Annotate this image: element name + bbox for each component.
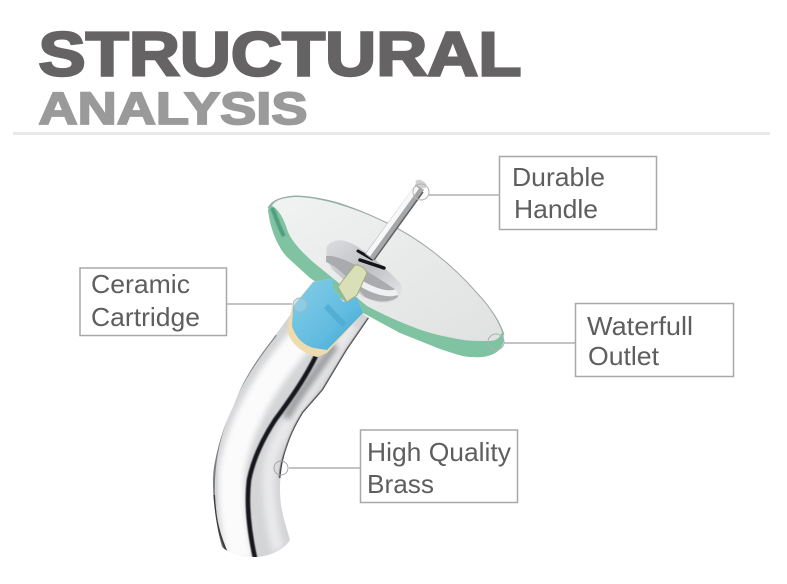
faucet spout	[212, 281, 369, 557]
callout: High Quality Brass: Brass	[367, 469, 434, 499]
lever handle	[368, 178, 428, 260]
glass disc	[268, 196, 504, 357]
title: STRUCTURAL: STRUCTURAL	[38, 20, 522, 90]
callout: High Quality Brass: High Quality	[367, 437, 511, 467]
subtitle: ANALYSIS: ANALYSIS	[38, 83, 308, 134]
callout: Waterfull Outlet: Outlet	[588, 341, 660, 371]
callout: Ceramic Cartridge: Cartridge	[91, 302, 200, 332]
blue ceramic cartridge	[287, 265, 367, 357]
callout: Waterfull Outlet	[488, 304, 734, 376]
callout: Durable Handle	[413, 156, 656, 230]
callout: Waterfull Outlet: Waterfull	[587, 311, 693, 341]
callout: Durable Handle: Durable	[512, 162, 605, 192]
callout: Ceramic Cartridge	[80, 268, 307, 336]
callout: High Quality Brass	[274, 430, 518, 502]
chrome base	[326, 240, 402, 303]
callout: Ceramic Cartridge: Ceramic	[91, 269, 190, 299]
callout: Durable Handle: Handle	[514, 194, 598, 224]
faucet illustration	[205, 178, 504, 565]
